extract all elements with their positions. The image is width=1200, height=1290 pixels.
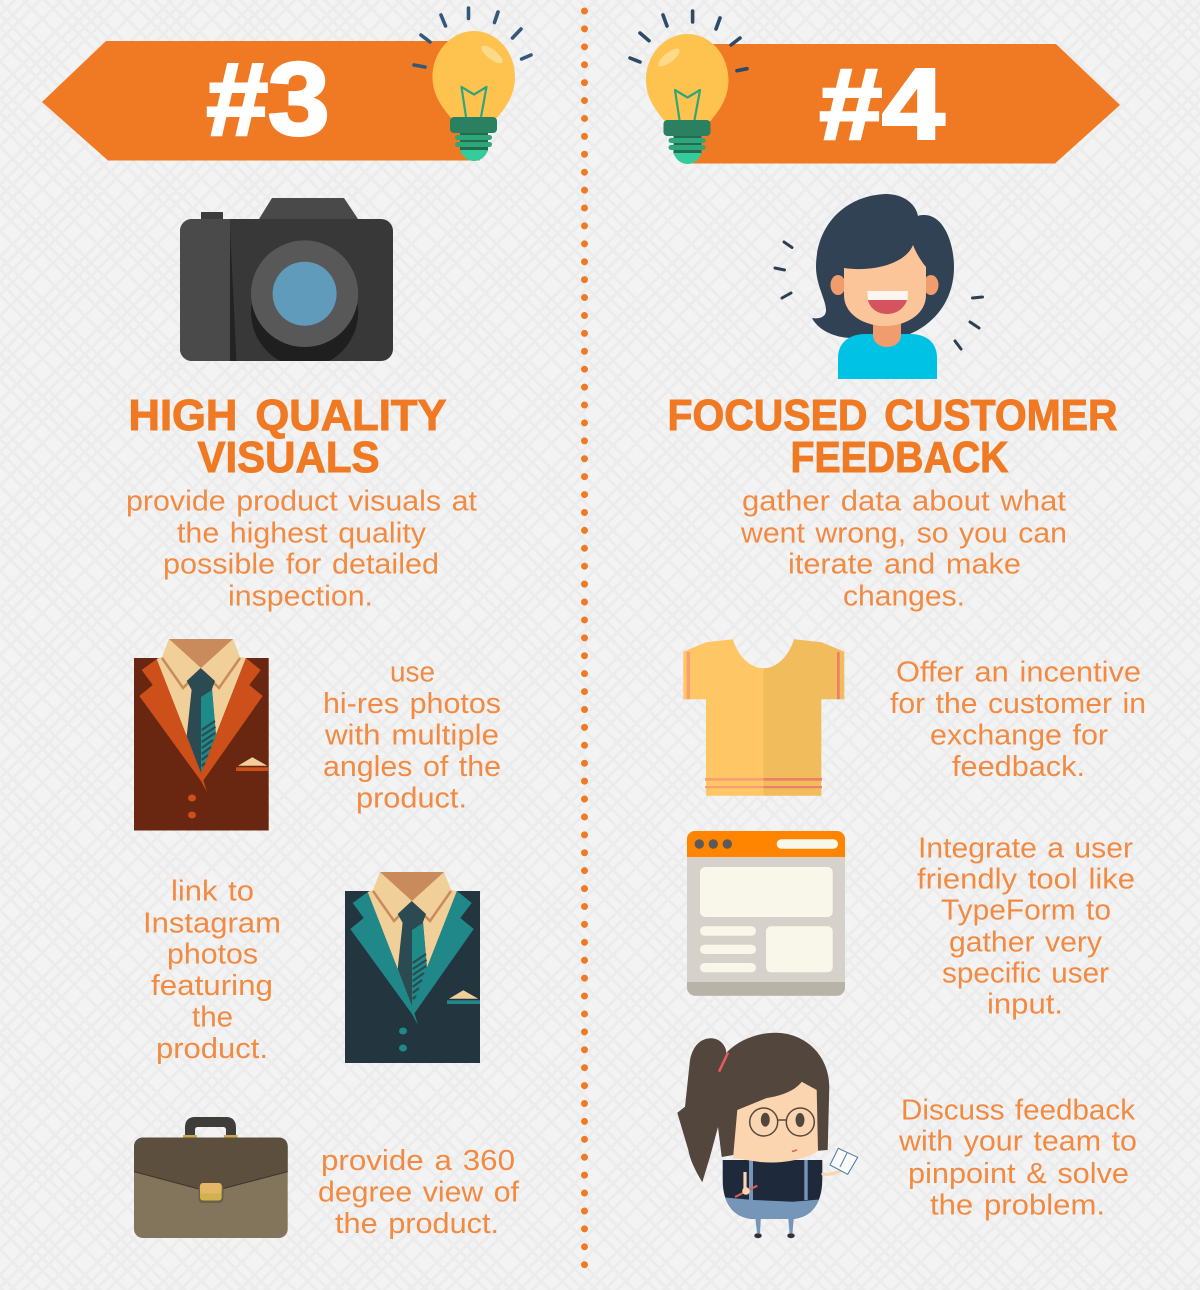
text: 360 degree view: degree view of xyxy=(318,1176,520,1208)
text: 360 degree view: provide a 360 xyxy=(321,1145,515,1177)
text: typeform tool: friendly tool like xyxy=(917,864,1135,896)
text: instagram photos: link to xyxy=(171,876,254,908)
heading: high quality visuals: HIGH QUALITY xyxy=(128,391,446,440)
text: typeform tool: specific user xyxy=(942,958,1109,990)
icon: camera xyxy=(180,198,393,367)
text: discuss feedback xyxy=(898,1094,1137,1222)
icon: light bulb right xyxy=(630,11,747,164)
text: section description xyxy=(126,486,477,612)
text: section description: provide product visuals at xyxy=(126,486,477,518)
text: discuss feedback: the problem. xyxy=(930,1190,1105,1222)
icon: briefcase xyxy=(134,1117,288,1238)
text: section description xyxy=(740,486,1067,612)
icon: t-shirt xyxy=(683,639,844,796)
banner: #3 xyxy=(42,41,480,160)
text: section description: went wrong, so you can xyxy=(740,518,1067,550)
text: incentive: for the customer in xyxy=(890,688,1146,720)
banner: #3: #3 xyxy=(206,42,330,156)
text: hi-res photos: hi-res photos xyxy=(323,688,501,720)
heading: focused customer feedback: FEEDBACK xyxy=(790,433,1009,482)
text: hi-res photos: use xyxy=(390,656,435,688)
text: typeform tool: TypeForm to xyxy=(941,894,1111,926)
text: hi-res photos: angles of the xyxy=(323,751,501,783)
text: incentive xyxy=(890,656,1146,783)
icon: smiling woman xyxy=(775,194,982,379)
icon: brown jacket xyxy=(134,639,269,830)
text: instagram photos: product. xyxy=(156,1033,268,1065)
text: incentive: feedback. xyxy=(952,751,1085,783)
text: typeform tool xyxy=(917,832,1135,1020)
icon: browser window xyxy=(687,831,845,996)
text: discuss feedback: pinpoint & solve xyxy=(908,1158,1129,1190)
text: discuss feedback: Discuss feedback xyxy=(901,1094,1135,1126)
panel: #3 high quality visuals xyxy=(42,8,531,1240)
text: instagram photos: Instagram xyxy=(143,908,281,940)
text: hi-res photos: product. xyxy=(356,782,467,814)
text: section description: changes. xyxy=(843,580,965,612)
text: section description: inspection. xyxy=(228,580,373,612)
text: section description: the highest quality xyxy=(177,518,427,550)
heading: high quality visuals xyxy=(128,391,446,482)
banner: #4 xyxy=(690,44,1120,164)
text: instagram photos xyxy=(143,876,281,1065)
icon: teal jacket xyxy=(345,872,480,1063)
text: discuss feedback: with your team to xyxy=(898,1126,1137,1158)
text: 360 degree view xyxy=(318,1145,520,1240)
text: 360 degree view: the product. xyxy=(335,1208,499,1240)
text: typeform tool: input. xyxy=(987,988,1063,1020)
text: typeform tool: gather very xyxy=(949,926,1103,958)
text: instagram photos: featuring xyxy=(151,970,273,1002)
text: hi-res photos xyxy=(323,656,501,814)
text: instagram photos: the xyxy=(192,1002,233,1034)
icon: girl with glasses xyxy=(677,1033,858,1238)
text: hi-res photos: with multiple xyxy=(324,720,499,752)
text: instagram photos: photos xyxy=(167,938,258,970)
panel: #4 focused customer feedback xyxy=(630,11,1146,1238)
heading: high quality visuals: VISUALS xyxy=(198,433,380,482)
heading: focused customer feedback: FOCUSED CUSTOMER xyxy=(668,391,1118,440)
banner: #4: #4 xyxy=(820,48,945,160)
text: section description: possible for detailed xyxy=(163,548,439,580)
heading: focused customer feedback xyxy=(668,391,1118,482)
icon: light bulb left xyxy=(414,8,531,161)
dotted divider xyxy=(581,11,588,1265)
text: section description: iterate and make xyxy=(788,548,1021,580)
text: incentive: exchange for xyxy=(930,720,1108,752)
text: typeform tool: Integrate a user xyxy=(918,832,1133,864)
text: section description: gather data about what xyxy=(742,486,1066,518)
text: incentive: Offer an incentive xyxy=(896,656,1141,688)
